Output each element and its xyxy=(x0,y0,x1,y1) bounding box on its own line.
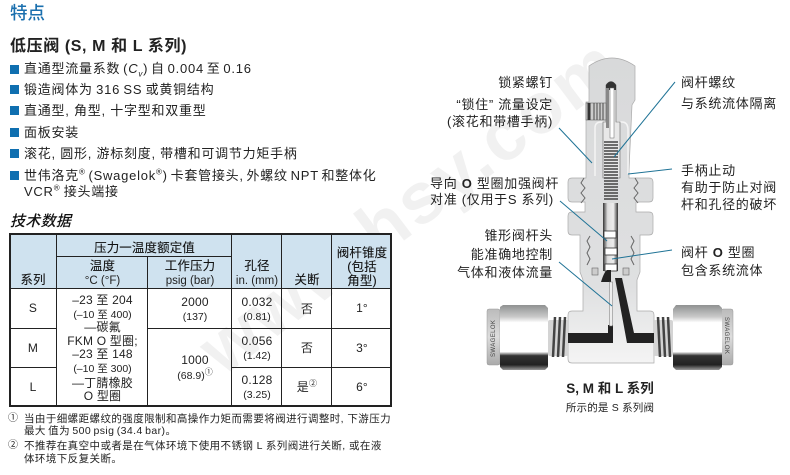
technical data table: O 型圈 xyxy=(84,389,121,403)
technical data table: (0.81) xyxy=(243,311,271,323)
label: stem o-ring: 包含系统流体 xyxy=(681,262,763,278)
label: tapered stem tip: 气体和液体流量 xyxy=(457,265,553,280)
technical data table: 温度 xyxy=(90,259,115,273)
leader lines xyxy=(559,82,675,306)
footnotes: 最大 值为 500 psig (34.4 bar)。 xyxy=(24,425,176,437)
technical data table: M xyxy=(28,341,38,355)
right fitting xyxy=(654,305,733,370)
feature list: 面板安装 xyxy=(24,125,79,140)
feature list xyxy=(10,61,377,199)
technical data table: –23 至 204 xyxy=(72,293,133,307)
technical data table: 阀杆锥度 xyxy=(337,246,387,260)
technical data table: (68.9)① xyxy=(177,368,213,382)
technical data table: L xyxy=(30,380,36,394)
technical data table: (137) xyxy=(183,311,207,323)
label: locked flow setting: “锁住” 流量设定 xyxy=(456,97,553,112)
technical data table: 3° xyxy=(356,341,368,355)
label: stem o-ring: 阀杆 O 型圈 xyxy=(681,245,755,260)
technical data table: 否 xyxy=(301,302,313,316)
technical data table: 关断 xyxy=(294,273,320,287)
title: 特点 xyxy=(10,3,45,23)
footnotes: 不推荐在真空中或者是在气体环境下使用不锈钢 L 系列阀进行关断, 或在液 xyxy=(24,440,382,452)
technical data table: 否 xyxy=(301,341,313,355)
left fitting xyxy=(487,305,568,370)
feature list: 世伟洛克® (Swagelok®) 卡套管接头, 外螺纹 NPT 和整体化 xyxy=(24,168,377,183)
technical data table: (3.25) xyxy=(243,389,271,401)
feature list: VCR® 接头端接 xyxy=(24,184,119,199)
technical data table: (包括 xyxy=(347,260,377,274)
stem thread spring xyxy=(604,142,618,199)
caption: S, M 和 L 系列 xyxy=(566,381,654,396)
sub-caption: 所示的是 S 系列阀 xyxy=(566,402,654,414)
technical data table: 0.032 xyxy=(241,295,273,309)
footnotes: ② xyxy=(8,440,18,451)
technical data table: 1° xyxy=(356,301,368,315)
feature list: 直通型流量系数 (Cv) 自 0.004 至 0.16 xyxy=(24,61,252,79)
technical data table: –23 至 148 xyxy=(72,347,133,361)
technical data table: in. (mm) xyxy=(236,275,278,287)
technical data table: psig (bar) xyxy=(166,275,214,287)
technical data table xyxy=(9,233,392,407)
footnotes: 体环境下反复关断。 xyxy=(24,453,122,465)
footnotes: 当由于细螺距螺纹的强度限制和高操作力矩而需要将阀进行调整时, 下游压力 xyxy=(24,413,391,425)
technical data table: 角型) xyxy=(347,274,377,288)
label: tapered stem tip: 能准确地控制 xyxy=(471,246,553,262)
footnotes: ① xyxy=(8,413,18,424)
label: guide o-ring: 对准 (仅用于S 系列) xyxy=(430,192,554,207)
technical data table: (–10 至 400) xyxy=(73,309,132,321)
label: handle stop xyxy=(681,163,777,212)
technical data table: 0.128 xyxy=(241,373,273,387)
feature list: 直通型, 角型, 十字型和双重型 xyxy=(24,103,206,118)
technical data table: (–10 至 300) xyxy=(73,363,132,375)
technical data table: 6° xyxy=(356,380,368,394)
flow passages xyxy=(568,270,654,343)
technical data table: 工作压力 xyxy=(165,259,215,273)
footnotes xyxy=(8,412,391,465)
technical data table: 孔径 xyxy=(244,259,270,273)
technical data table: 系列 xyxy=(20,273,46,287)
technical data table: 0.056 xyxy=(241,334,273,348)
technical data table: S xyxy=(29,301,37,315)
technical data table: 压力一温度额定值 xyxy=(94,241,195,255)
technical data table: 是② xyxy=(297,379,317,394)
table heading: 技术数据 xyxy=(10,213,71,230)
label: tapered stem tip xyxy=(457,228,553,280)
set screw xyxy=(586,103,606,120)
technical data table: (1.42) xyxy=(243,350,271,362)
label: isolated from fluid: 与系统流体隔离 xyxy=(681,96,777,111)
label: handle stop: 杆和孔径的破坏 xyxy=(681,197,777,212)
label: guide o-ring: 导向 O 型圈加强阀杆 xyxy=(430,176,559,191)
label: handle stop: 有助于防止对阀 xyxy=(681,180,777,195)
left fitting: SWAGELOK xyxy=(491,320,497,357)
label: handle stop: 手柄止动 xyxy=(681,163,736,178)
label: set screw: 锁紧螺钉 xyxy=(498,75,553,90)
right fitting: SWAGELOK xyxy=(723,317,729,354)
technical data table: —碳氟 xyxy=(84,320,121,334)
technical data table: 1000 xyxy=(181,353,209,367)
label: locked flow setting xyxy=(447,97,553,129)
label: locked flow setting: (滚花和带槽手柄) xyxy=(447,114,553,129)
label: stem o-ring xyxy=(681,245,763,278)
label: guide o-ring xyxy=(430,176,559,207)
label: stem thread: 阀杆螺纹 xyxy=(681,75,736,90)
handle bore and stem xyxy=(603,82,620,178)
stem and packing xyxy=(603,203,618,271)
valve body and bonnet xyxy=(568,58,654,363)
feature list: 滚花, 圆形, 游标刻度, 带槽和可调节力矩手柄 xyxy=(24,146,298,161)
feature list: 锻造阀体为 316 SS 或黄铜结构 xyxy=(24,82,214,97)
technical data table: FKM O 型圈; xyxy=(67,334,138,348)
technical data table: 2000 xyxy=(181,295,209,309)
bonnet threads xyxy=(581,178,638,265)
subheading: low pressure valves: 低压阀 (S, M 和 L 系列) xyxy=(10,38,187,55)
technical data table: °C (°F) xyxy=(85,275,120,287)
label: tapered stem tip: 锥形阀杆头 xyxy=(484,228,553,243)
watermark: www.hsy.com xyxy=(184,22,636,390)
technical data table: —丁腈橡胶 xyxy=(72,376,133,390)
